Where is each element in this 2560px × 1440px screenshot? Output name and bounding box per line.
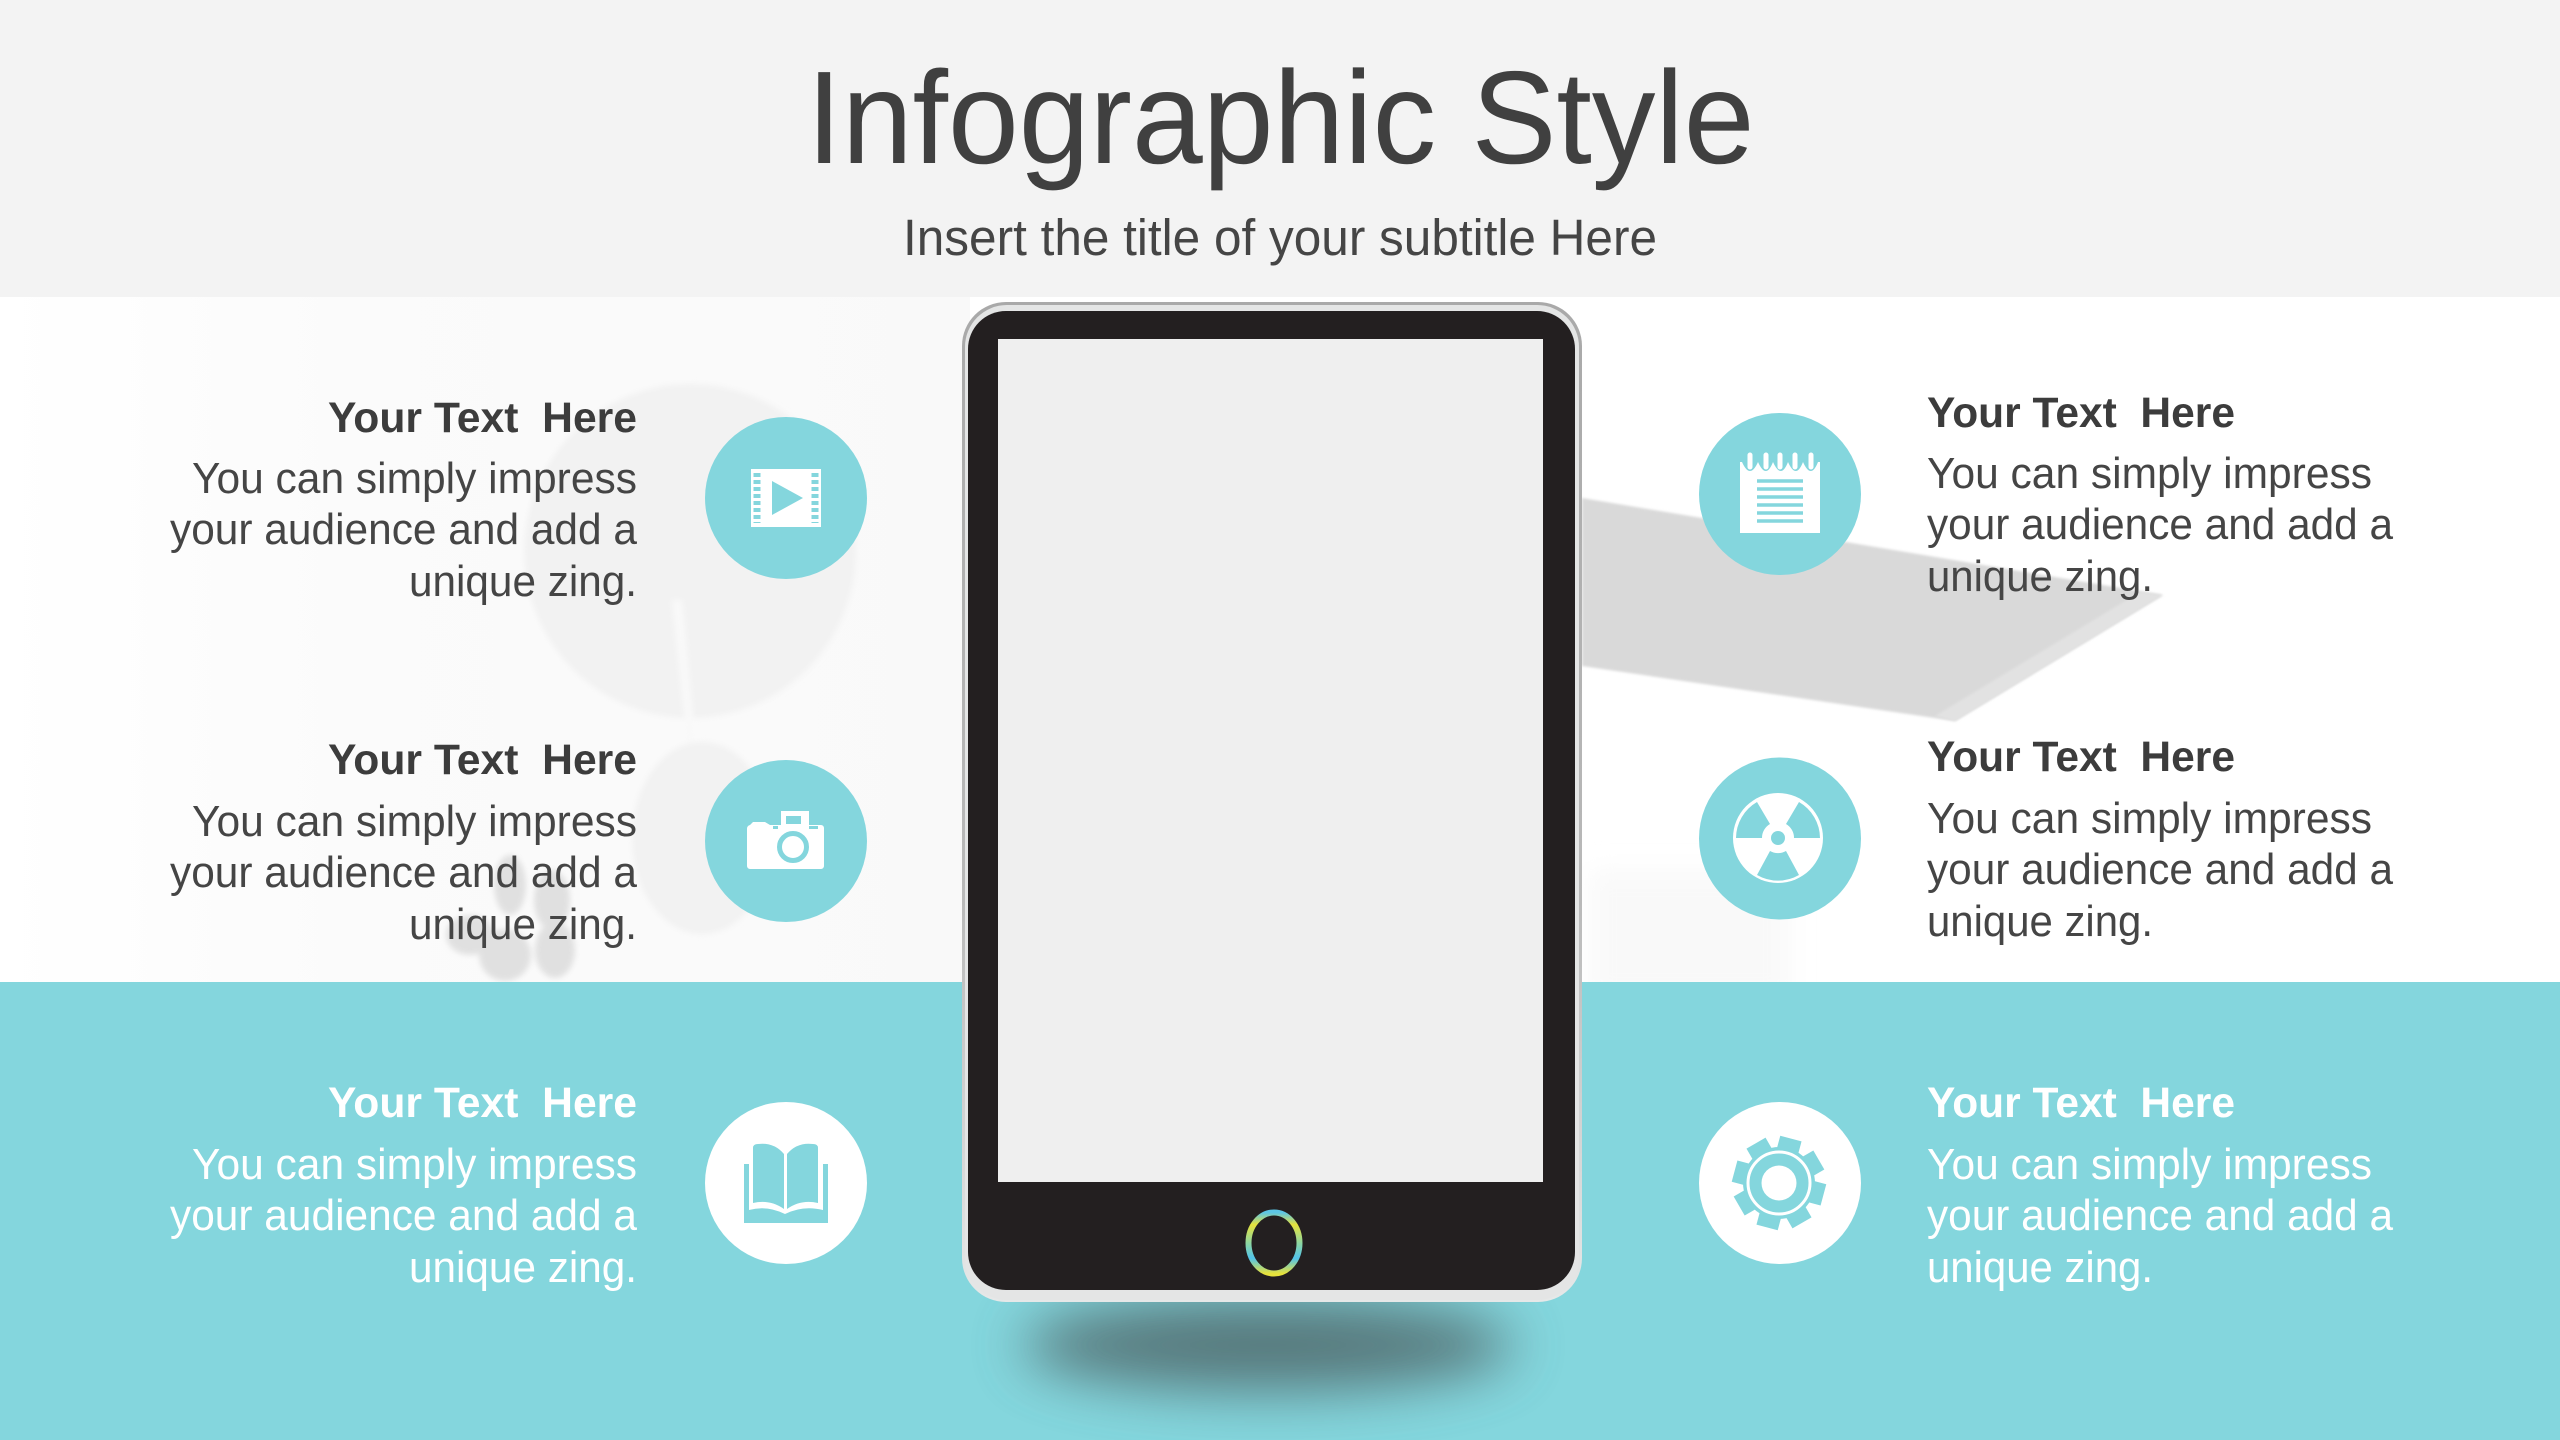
body text: your audience and add a: [170, 1191, 638, 1240]
icon: open book: [705, 1102, 867, 1264]
body text: You can simply impress: [1927, 449, 2372, 498]
body text: your audience and add a: [170, 505, 638, 554]
icon: notepad: [1699, 413, 1861, 575]
body text: your audience and add a: [1927, 1191, 2394, 1240]
panel: teal band: [0, 982, 2560, 1440]
body text: [1927, 449, 2394, 601]
item: book, left bottom: [170, 1079, 638, 1292]
shelf: [1582, 498, 2163, 721]
panel: faded photo background: [0, 297, 2560, 1000]
item: film, left top: [170, 394, 638, 606]
icon: camera: [705, 760, 867, 922]
body text: You can simply impress: [192, 797, 637, 846]
flower: [446, 855, 575, 981]
subtitle: Insert the title of your subtitle Here: [903, 209, 1657, 266]
title: Infographic Style: [806, 44, 1754, 191]
icon: gear: [1699, 1102, 1861, 1264]
tablet inner highlight: [965, 305, 1579, 1300]
tablet screen: [998, 339, 1543, 1182]
item: camera, left middle: [170, 736, 638, 949]
home button: [1248, 1212, 1300, 1274]
body text: [170, 797, 638, 949]
heading: Your Text Here: [328, 736, 637, 784]
body text: You can simply impress: [1927, 794, 2372, 843]
icon: radiation: [1699, 758, 1861, 920]
heading: Your Text Here: [1927, 733, 2235, 781]
body text: unique zing.: [1927, 897, 2153, 946]
heading: Your Text Here: [328, 394, 637, 442]
body text: unique zing.: [409, 557, 637, 606]
body text: You can simply impress: [192, 1140, 637, 1189]
tablet rim: [962, 302, 1582, 1302]
tablet: [962, 302, 1582, 1302]
body text: [1927, 1140, 2394, 1292]
heading: Your Text Here: [1927, 389, 2235, 437]
body text: unique zing.: [1927, 1243, 2153, 1292]
keyboard: [1590, 870, 1790, 1000]
body text: You can simply impress: [192, 454, 637, 503]
lamp stem: [672, 600, 698, 770]
body text: your audience and add a: [1927, 500, 2394, 549]
round vase: [632, 742, 772, 934]
tablet shadow: [1023, 1299, 1513, 1391]
lamp shade: [524, 384, 856, 718]
body text: unique zing.: [1927, 552, 2153, 601]
body text: unique zing.: [409, 900, 637, 949]
panel: header band: [0, 0, 2560, 297]
body text: unique zing.: [409, 1243, 637, 1292]
heading: Your Text Here: [328, 1079, 637, 1127]
item: gear, right bottom: [1927, 1079, 2394, 1292]
body text: your audience and add a: [170, 848, 638, 897]
body text: You can simply impress: [1927, 1140, 2372, 1189]
body text: [170, 1140, 638, 1292]
heading: Your Text Here: [1927, 1079, 2235, 1127]
body text: your audience and add a: [1927, 845, 2394, 894]
body text: [1927, 794, 2394, 946]
item: notepad, right top: [1927, 389, 2394, 601]
item: radiation, right middle: [1927, 733, 2394, 946]
tablet body: [968, 311, 1575, 1290]
icon: film play: [705, 417, 867, 579]
wall frame: [620, 742, 962, 748]
body text: [170, 454, 638, 606]
